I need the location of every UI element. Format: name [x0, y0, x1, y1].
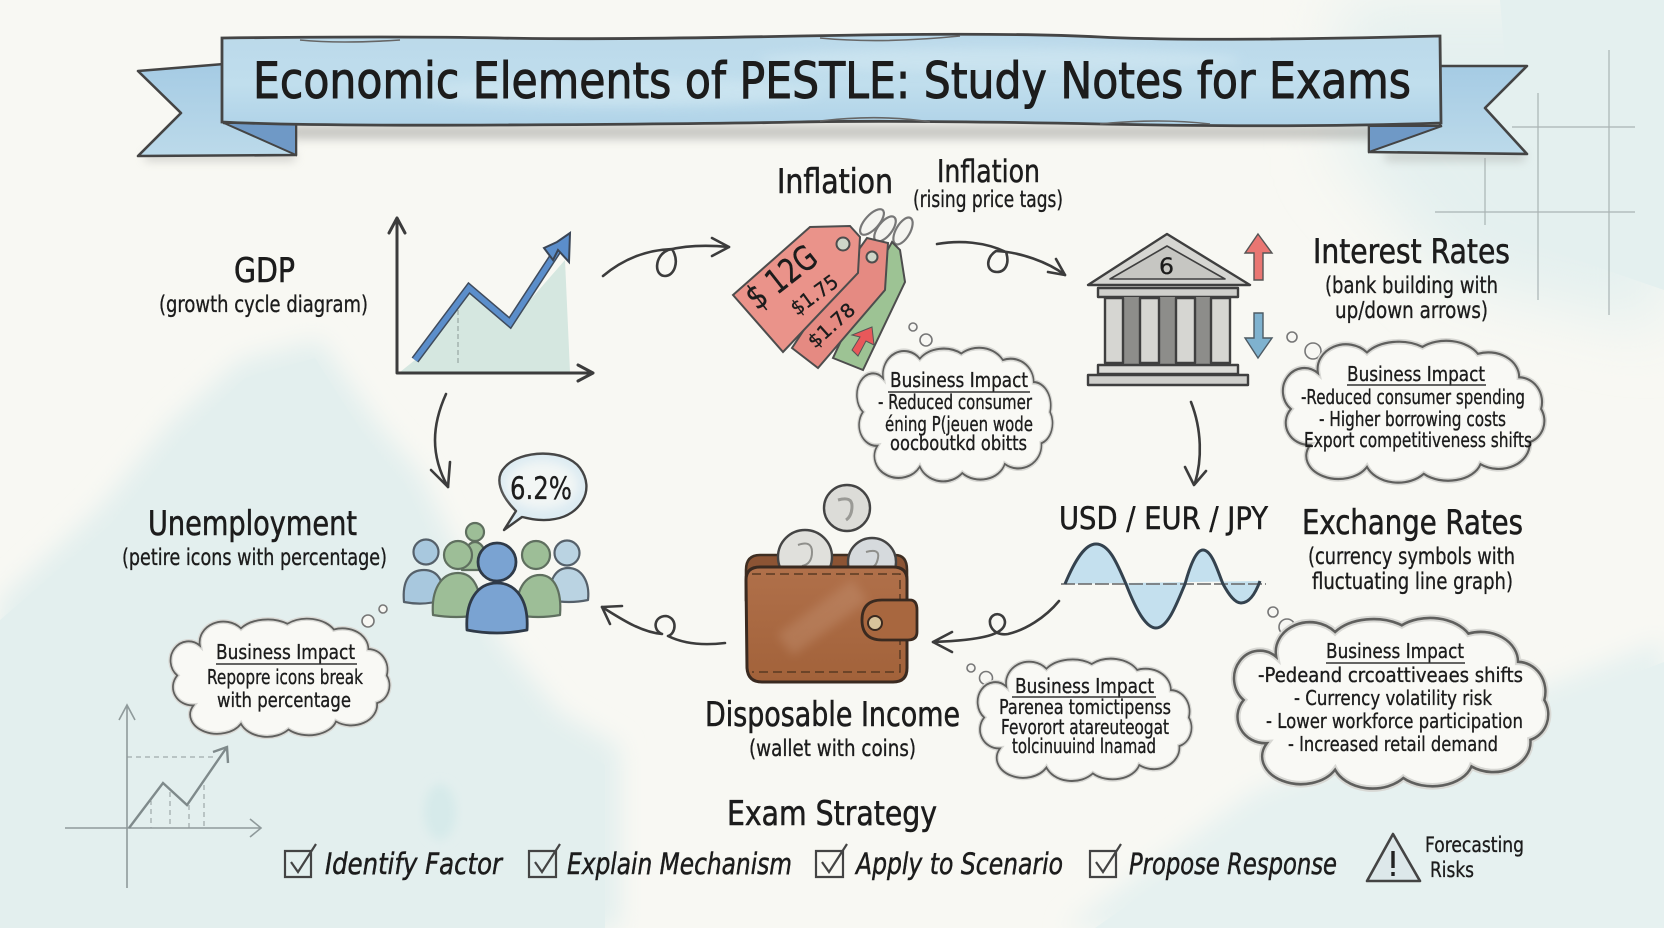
- cloud heading: Business Impact: [1347, 362, 1485, 386]
- cloud heading: Business Impact: [1326, 639, 1464, 663]
- thought bubble: exchange rates business impact: [1234, 607, 1548, 789]
- title: Economic Elements of PESTLE: Study Notes for Exams: [253, 52, 1411, 110]
- icon: down arrow: [1245, 313, 1272, 358]
- checklist item: identify factor: Identify Factor: [325, 847, 504, 881]
- panel: inflation: [733, 154, 1063, 481]
- panel: GDP: [159, 218, 593, 381]
- tag price: $1.78: $1.78: [804, 299, 860, 353]
- icon: up arrow: [1245, 234, 1272, 280]
- checklist item: propose response: Propose Response: [1129, 847, 1337, 881]
- icon: wallet with coins: [746, 485, 917, 682]
- checklist item: explain mechanism: [529, 844, 792, 881]
- cloud line 2: éning P(jeuen wode: [885, 412, 1033, 436]
- panel: exam strategy: [285, 794, 1524, 882]
- subtitle: unemployment: (petire icons with percentage): [122, 545, 387, 571]
- chart: GDP growth: [389, 218, 593, 381]
- cloud line 4: - Increased retail demand: [1288, 732, 1498, 756]
- heading: exam strategy: Exam Strategy: [727, 794, 937, 834]
- heading: disposable income: Disposable Income: [705, 695, 960, 735]
- cloud line 3: - Lower workforce participation: [1266, 709, 1523, 733]
- subtitle line 2: fluctuating line graph): [1312, 569, 1513, 595]
- pediment numeral: 6: [1159, 255, 1174, 280]
- heading: inflation (left): Inflation: [777, 162, 893, 202]
- cloud line 1: -Pedeand crcoattiveaes shifts: [1258, 663, 1523, 687]
- note: forecasting risks line 2: Risks: [1430, 858, 1474, 882]
- arrow: interest rates to exchange rates: [1185, 402, 1206, 485]
- panel: disposable income: [705, 485, 1192, 781]
- heading: interest rates: Interest Rates: [1313, 232, 1510, 272]
- heading: unemployment: Unemployment: [148, 504, 357, 544]
- subtitle: inflation: (rising price tags): [913, 187, 1063, 213]
- icon: price tags: [733, 205, 917, 370]
- panel: interest rates: [1088, 232, 1544, 483]
- checklist item: explain mechanism: Explain Mechanism: [567, 847, 792, 881]
- checklist item: propose response: [1090, 844, 1337, 881]
- cloud line 2: Fevorort atareuteogat: [1001, 715, 1169, 739]
- arrow: GDP to unemployment: [431, 394, 450, 487]
- thought bubble: disposable income business impact: [967, 659, 1192, 781]
- cloud line 1: -Reduced consumer spending: [1301, 385, 1525, 409]
- arrow: exchange rates to disposable income: [933, 601, 1059, 652]
- panel: exchange rates: [1059, 501, 1548, 789]
- cloud line 1: - Reduced consumer: [878, 390, 1033, 414]
- chart: fluctuating line: [1061, 544, 1266, 628]
- checklist item: apply to scenario: [816, 844, 1063, 881]
- subtitle: disposable income: (wallet with coins): [749, 736, 916, 762]
- panel: unemployment: [122, 454, 588, 737]
- faint sketch grid, top right: [1435, 50, 1635, 315]
- cloud line 3: tolcinuuind lnamad: [1012, 734, 1156, 758]
- cloud heading: Business Impact: [1015, 674, 1154, 698]
- cloud line 3: oocboutkd obitts: [890, 431, 1027, 455]
- percentage value: 6.2%: [510, 471, 572, 507]
- subtitle line 1: (bank building with: [1325, 273, 1498, 299]
- cloud line 2: - Higher borrowing costs: [1319, 407, 1506, 431]
- cloud heading: Business Impact: [890, 368, 1028, 392]
- thought bubble: inflation business impact: [857, 323, 1053, 481]
- left ribbon tail: [138, 64, 296, 156]
- thought bubble: interest rates business impact: [1283, 332, 1544, 483]
- currency label: USD / EUR / JPY: [1059, 501, 1268, 537]
- heading: exchange rates: Exchange Rates: [1302, 503, 1523, 543]
- cloud line 1: Repopre icons break: [207, 665, 363, 689]
- cloud line 1: Parenea tomictipenss: [999, 695, 1171, 719]
- heading: GDP: GDP: [234, 251, 295, 291]
- icon: group of people: [404, 523, 588, 633]
- banner shadow: [145, 125, 1525, 160]
- title banner: [138, 34, 1527, 160]
- cloud line 3: Export competitiveness shifts: [1304, 428, 1532, 452]
- cloud line 2: with percentage: [217, 688, 351, 712]
- cloud heading: Business Impact: [216, 640, 355, 664]
- subtitle: GDP: (growth cycle diagram): [159, 292, 368, 318]
- banner body: [222, 34, 1441, 126]
- arrow: GDP to inflation: [603, 238, 729, 276]
- heading: inflation (right): Inflation: [937, 154, 1040, 190]
- tag price: $120: $ 12G: [738, 237, 826, 318]
- subtitle line 1: (currency symbols with: [1308, 544, 1515, 570]
- mini chart sketch, bottom left: [65, 705, 261, 888]
- subtitle line 2: up/down arrows): [1335, 298, 1488, 324]
- checklist item: identify factor: [285, 844, 504, 881]
- thought bubble: unemployment business impact: [171, 605, 389, 737]
- tag price: $1.75: $1.75: [786, 269, 843, 320]
- icon: warning triangle: [1367, 834, 1420, 881]
- cloud line 2: - Currency volatility risk: [1294, 686, 1492, 710]
- icon: bank building: [1088, 234, 1250, 385]
- arrow: disposable income to unemployment: [602, 606, 725, 644]
- right ribbon tail: [1369, 66, 1527, 154]
- checklist item: apply to scenario: Apply to Scenario: [854, 847, 1063, 881]
- icon: speech bubble with percentage: [499, 454, 586, 530]
- arrow: inflation to interest rates: [937, 242, 1065, 275]
- note: forecasting risks line 1: Forecasting: [1425, 833, 1524, 857]
